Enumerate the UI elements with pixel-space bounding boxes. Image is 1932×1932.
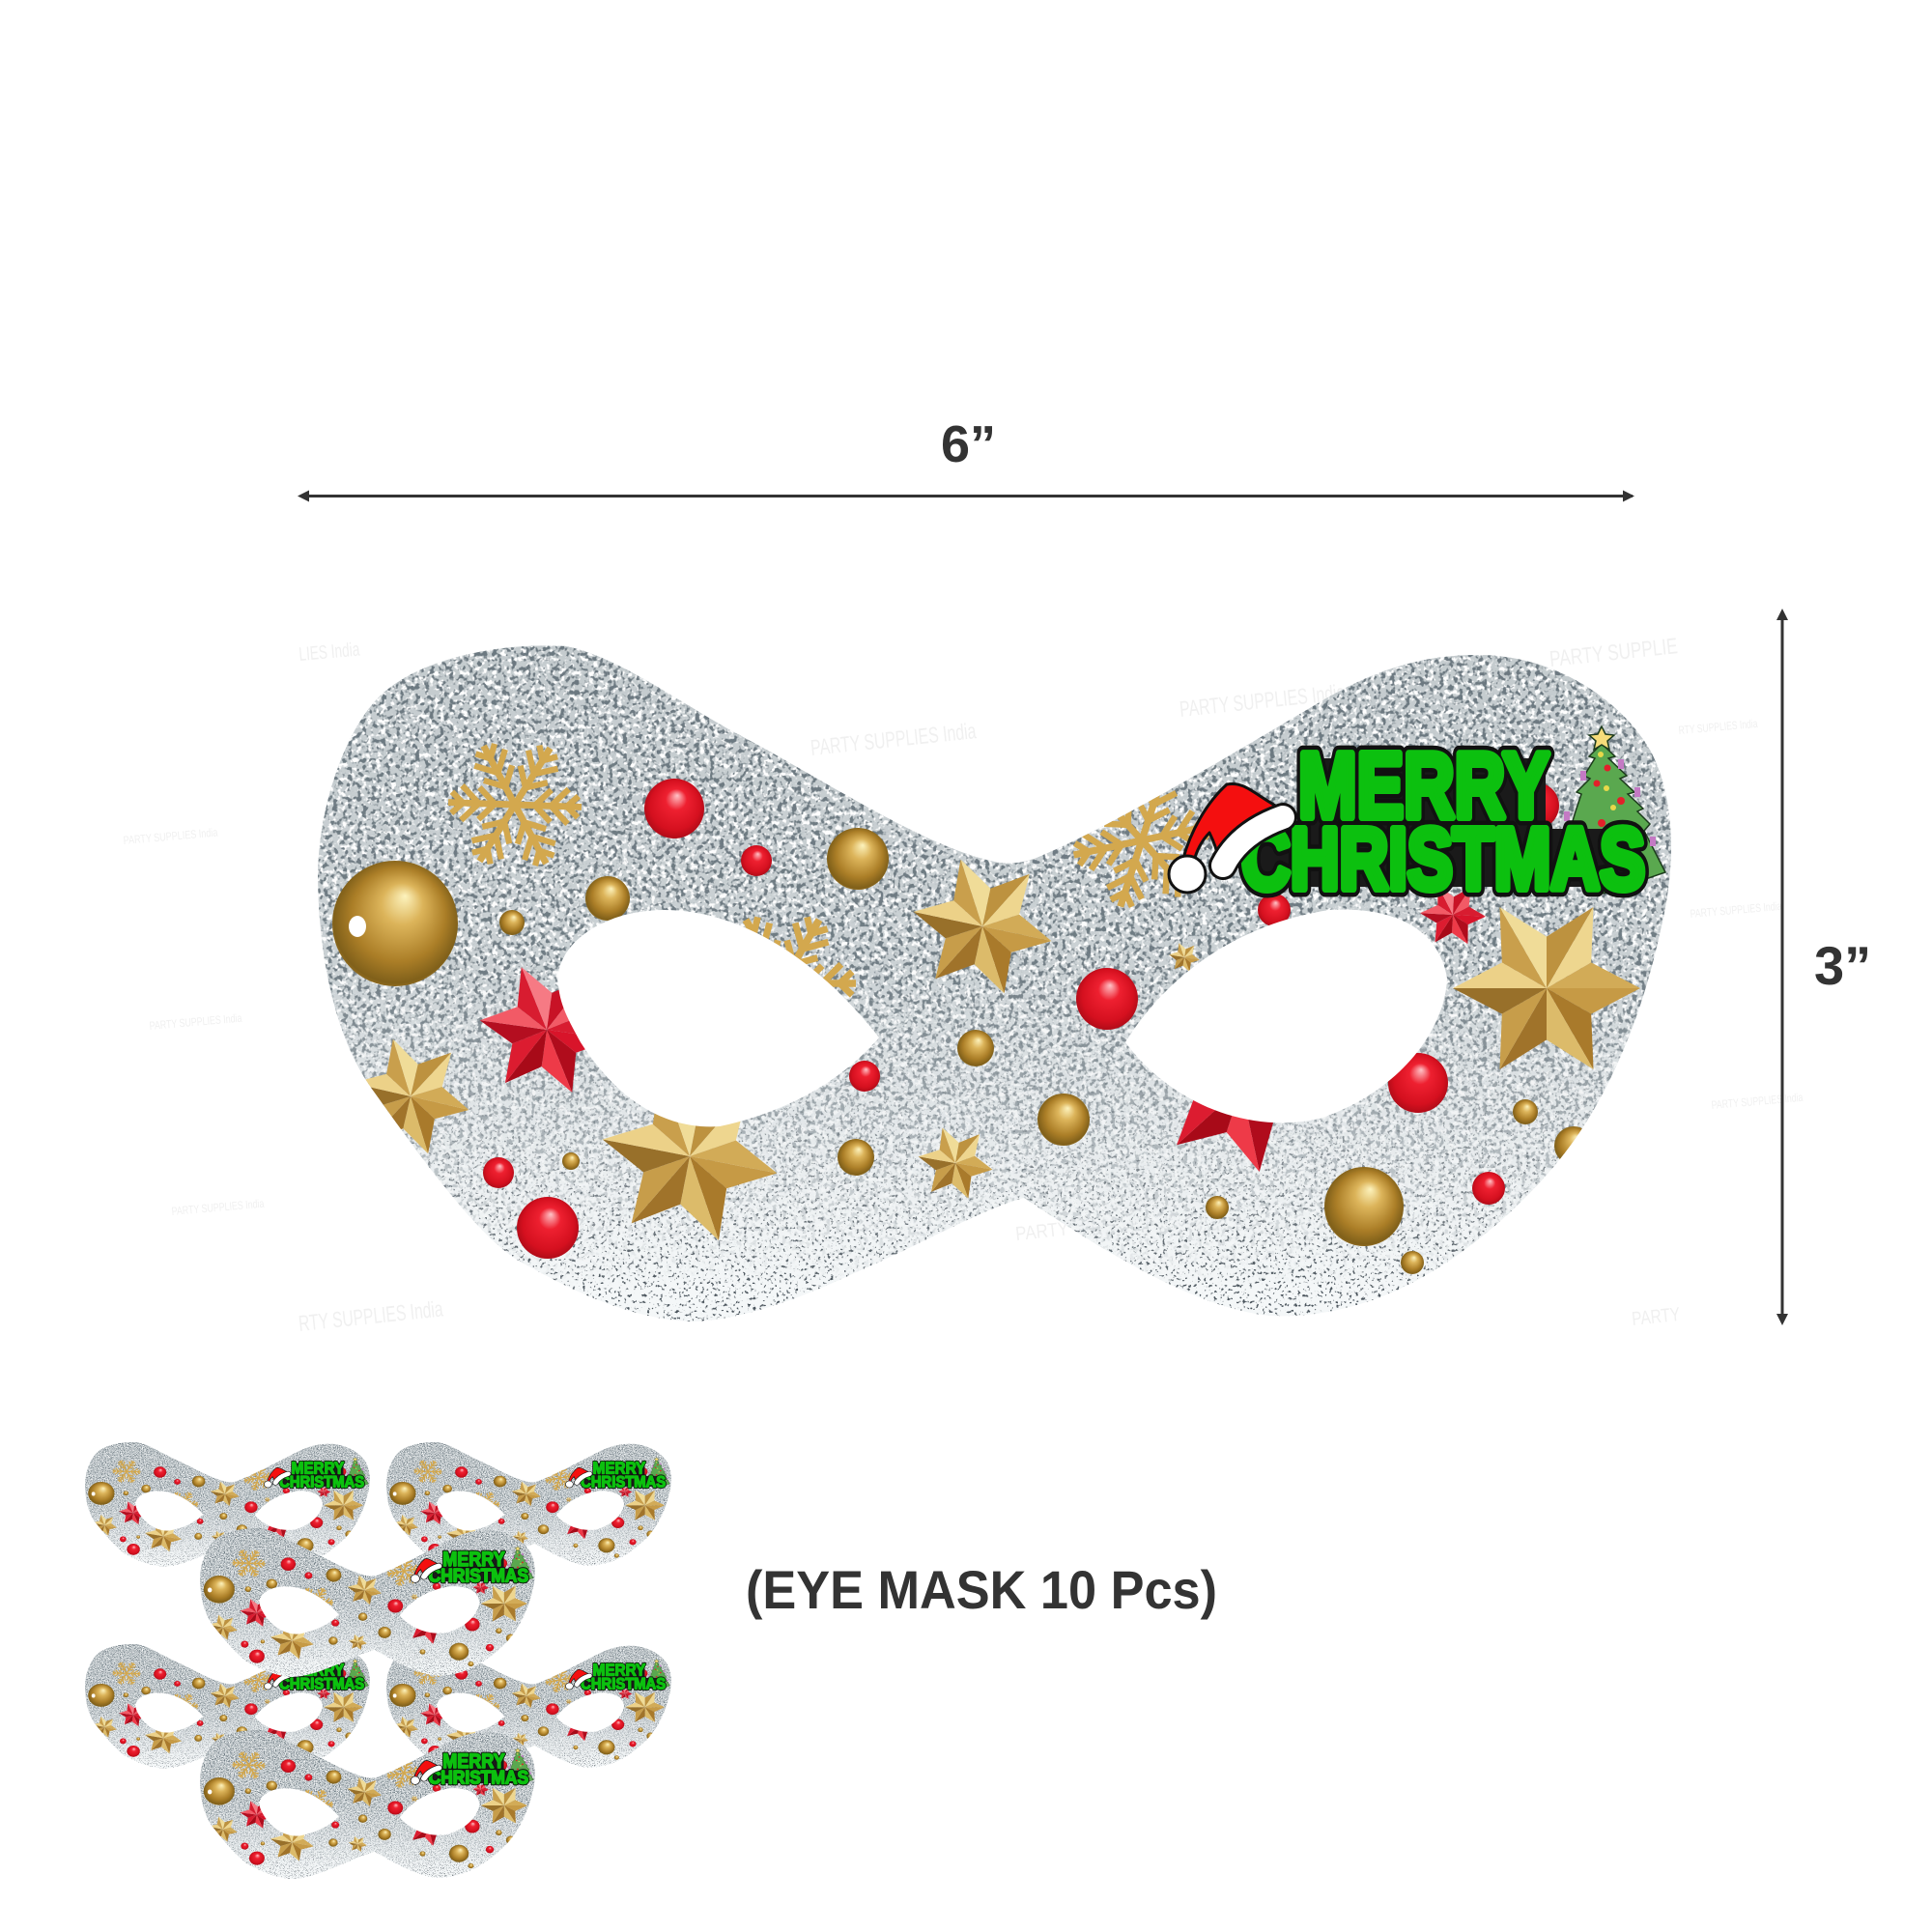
small mask 4 <box>85 1644 370 1769</box>
merry christmas logo: MERRY <box>1298 734 1549 838</box>
silver glitter fading downward <box>318 645 1671 1321</box>
main eye mask <box>318 645 1671 1321</box>
watermarks: PARTY SUPPLIE <box>1548 633 1679 671</box>
small mask 1 <box>85 1442 370 1567</box>
merry christmas logo: CHRISTMAS <box>1241 811 1645 908</box>
merry christmas logo: CHRISTMAS <box>1241 811 1645 908</box>
merry christmas logo: MERRY <box>1298 734 1549 838</box>
watermarks: LIES India <box>298 639 361 666</box>
small mask 5 <box>386 1644 671 1769</box>
eye holes <box>558 910 1447 1126</box>
small mask 3 <box>200 1528 535 1677</box>
small mask 2 <box>386 1442 671 1567</box>
icon: santa hat <box>1169 783 1290 893</box>
watermarks: PARTY SUPPLIES India <box>123 825 218 847</box>
black lettering backing <box>1251 758 1637 887</box>
watermarks: PARTY <box>1014 1218 1069 1245</box>
quantity caption: (EYE MASK 10 Pcs) <box>746 1559 1217 1620</box>
icon: gold stars <box>341 852 1640 1249</box>
ornaments on mask <box>332 736 1640 1274</box>
watermarks: PARTY SUPPLIES India <box>810 718 978 760</box>
watermarks <box>123 633 1804 1336</box>
icon: christmas tree <box>1564 726 1665 894</box>
watermarks: RTY SUPPLIES India <box>298 1295 444 1336</box>
white glitter base with sparse specks <box>318 645 1671 1321</box>
watermarks: PARTY SUPPLIES India <box>149 1011 242 1033</box>
merry christmas logo <box>1241 734 1645 908</box>
height label: 3” <box>1814 935 1871 996</box>
icon: red baubles <box>483 779 1559 1259</box>
width dimension arrow <box>298 491 1634 502</box>
watermarks: PARTY SUPPLIES India <box>1690 899 1782 921</box>
pack of small masks <box>85 1442 671 1879</box>
small mask 6 <box>200 1730 535 1879</box>
watermarks: RTY SUPPLIES India <box>1678 717 1758 737</box>
icon: gold snowflakes <box>446 736 1224 1057</box>
height dimension arrow <box>1776 609 1788 1325</box>
icon: gold baubles <box>332 828 1593 1274</box>
width label: 6” <box>941 415 996 473</box>
watermarks: PARTY SUPPLIES India <box>1711 1091 1804 1112</box>
watermarks: PARTY SUPPLIES India <box>171 1197 265 1218</box>
icon: red stars <box>471 885 1487 1185</box>
watermarks: PARTY SUPPLIES India <box>1179 679 1347 722</box>
watermarks: PARTY <box>1631 1304 1681 1330</box>
